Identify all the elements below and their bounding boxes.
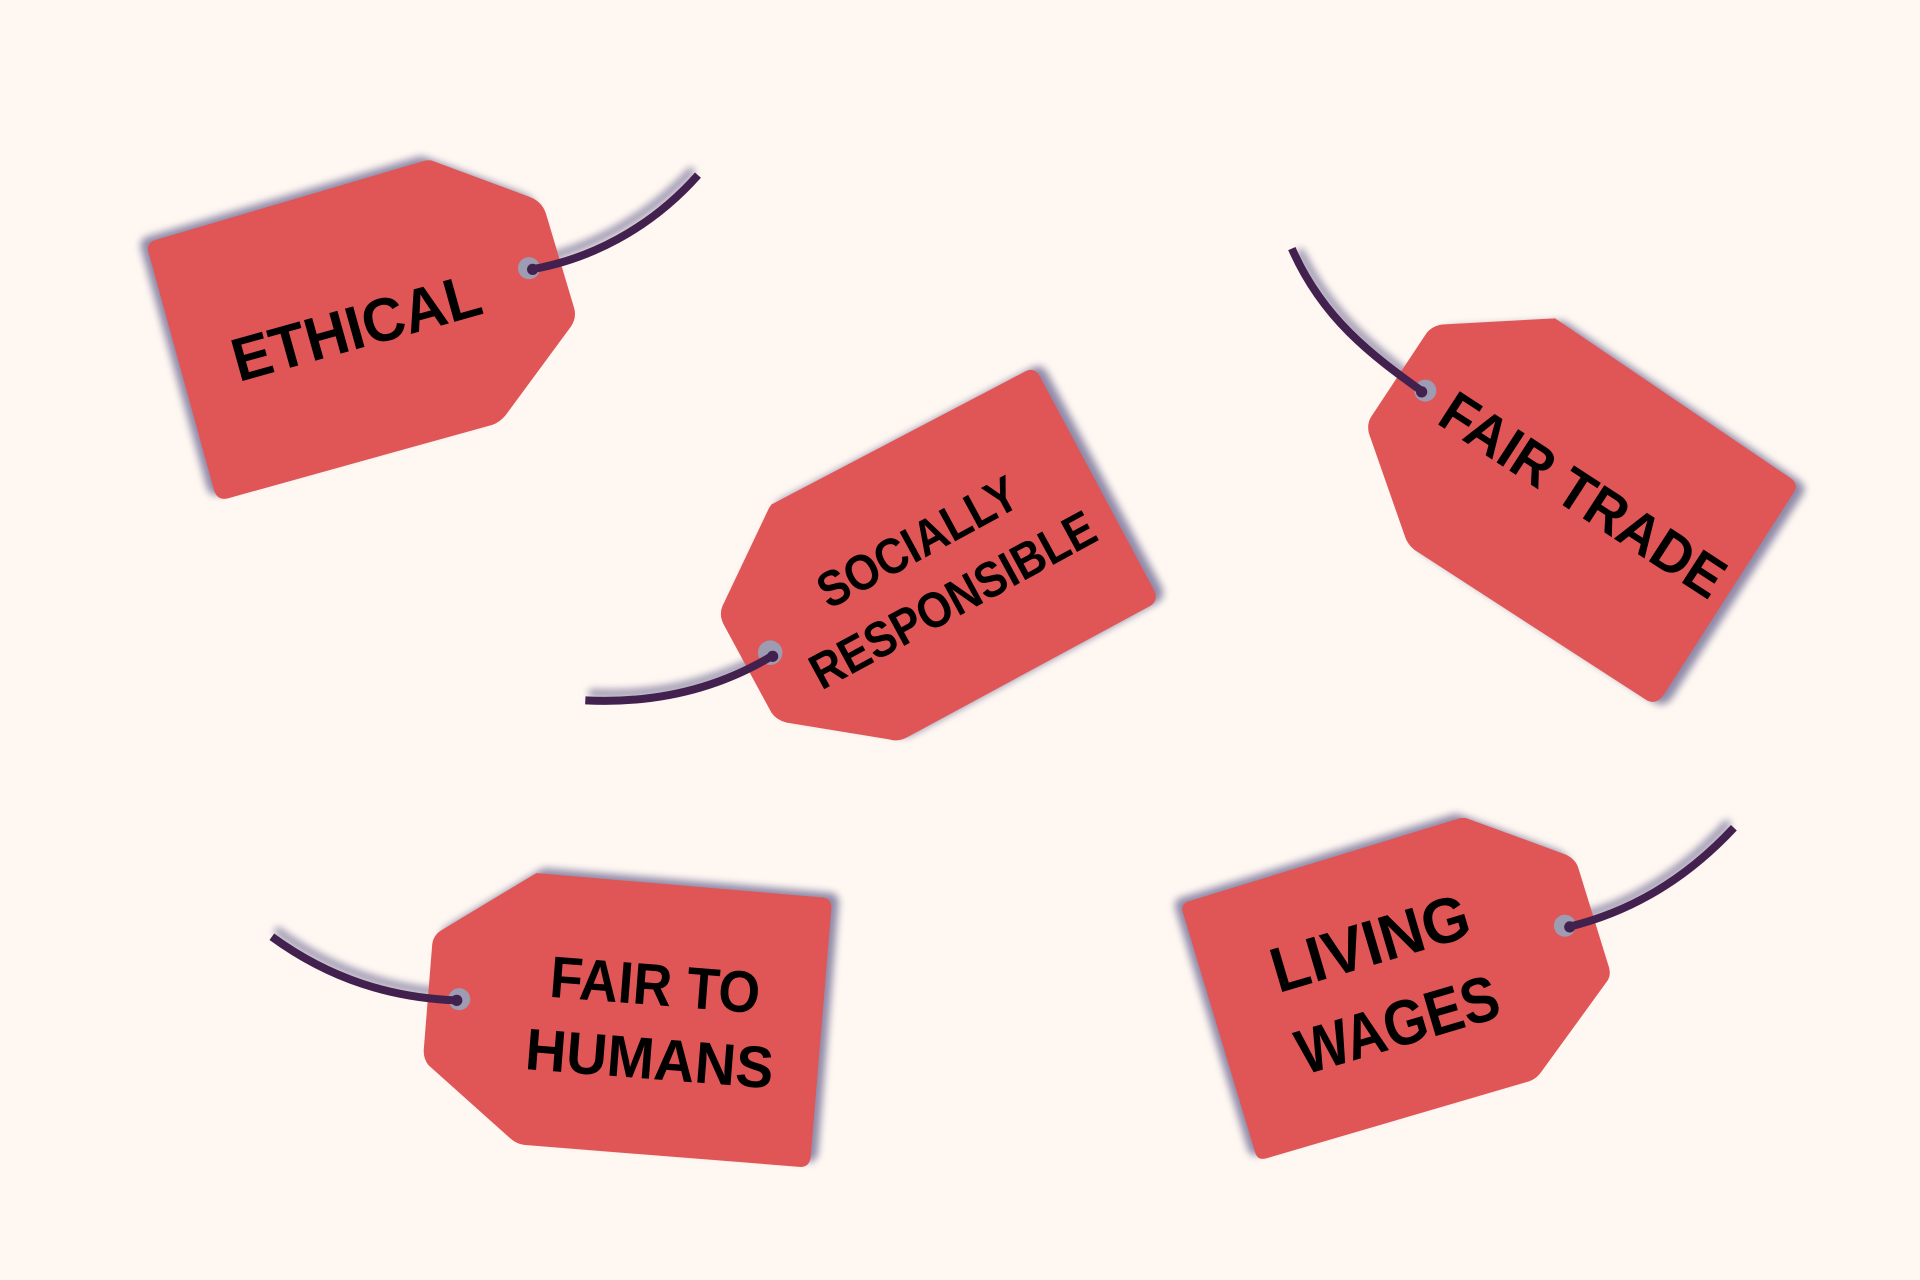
tag: ethical: [141, 157, 698, 499]
tag: fair trade: FAIR TRADE: [1428, 380, 1737, 611]
tag: living wages: [1175, 814, 1734, 1159]
tag: socially responsible: [585, 366, 1163, 740]
tag: fair to humans: FAIR TO: [548, 945, 763, 1026]
tag: socially responsible: SOCIALLY: [808, 465, 1028, 619]
tag: living wages: WAGES: [1288, 961, 1508, 1089]
tag: socially responsible: RESPONSIBLE: [800, 500, 1106, 700]
tag: ethical: ETHICAL: [224, 260, 489, 395]
tag: living wages: LIVING: [1262, 880, 1478, 1006]
tag: fair trade: [1292, 249, 1804, 704]
tag: fair to humans: HUMANS: [523, 1017, 776, 1101]
tag: fair to humans: [272, 868, 839, 1167]
